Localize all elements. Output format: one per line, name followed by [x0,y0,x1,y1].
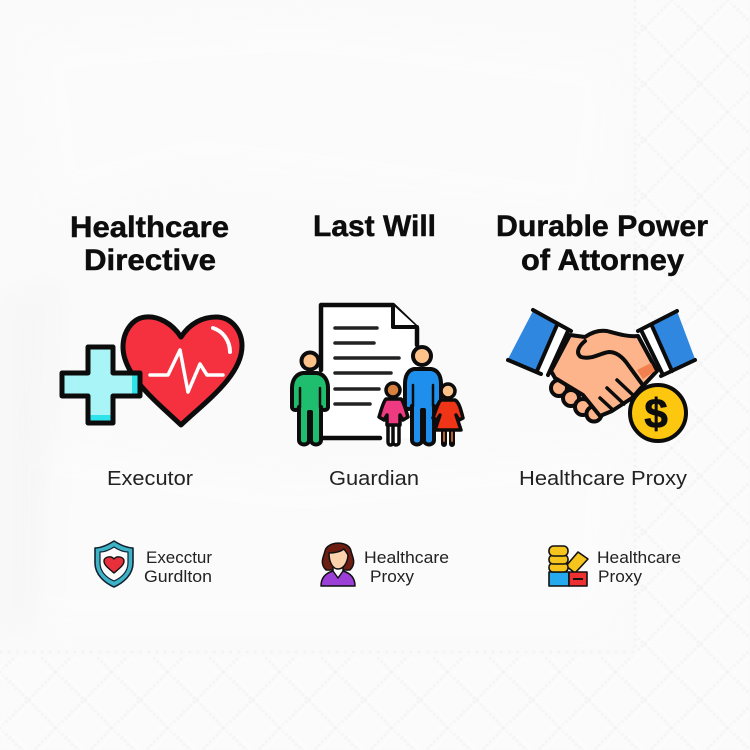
small item: Executor Guardian shield [95,541,212,587]
icon: will document with family [292,305,463,445]
heading: Healthcare Directive: Directive [84,244,216,277]
document [321,305,418,438]
column: last will [292,210,463,586]
icon: woman [321,543,355,586]
text: Healthcare Proxy [364,548,449,586]
icon: shield with heart [95,541,133,587]
heading: Durable Power of Attorney [496,210,708,277]
text: Healthcare Proxy: Proxy [598,567,642,586]
column: healthcare directive [62,211,242,587]
dollar coin [630,385,686,441]
heading: Durable Power of Attorney: Durable Power [496,210,708,243]
heading: Last Will: Last Will [313,210,436,243]
heading: Durable Power of Attorney: of Attorney [521,244,684,277]
heading: Healthcare Directive: Healthcare [70,211,229,244]
label: Executor: Executor [107,468,193,490]
text: Execctur Gurdlton: Execctur [146,548,212,567]
text: Execctur Gurdlton [144,548,212,586]
small item: Healthcare Proxy person [321,543,449,586]
person: girl in red [433,384,463,444]
text: Healthcare Proxy [597,548,681,586]
right cuff [638,311,695,376]
label: Healthcare Proxy: Healthcare Proxy [519,468,687,490]
text: Healthcare Proxy: Proxy [370,567,414,586]
dollar coin: $ [644,390,668,437]
icon: heart with medical cross [62,317,242,425]
label: Guardian: Guardian [329,468,419,490]
person: blue adult [405,347,441,444]
person: green adult [292,352,328,444]
text: Healthcare Proxy: Healthcare [597,548,681,567]
icon: coins and boxes [549,546,588,586]
text: Healthcare Proxy: Healthcare [364,548,449,567]
icon: handshake with dollar coin [508,310,695,441]
person: boy in pink [379,383,408,445]
clasped hands [551,331,657,422]
small item: Healthcare Proxy assets [549,546,681,586]
heading: Healthcare Directive [70,211,229,277]
column: durable power of attorney [496,210,708,586]
left cuff [508,310,571,375]
text: Execctur Gurdlton: Gurdlton [144,567,212,586]
